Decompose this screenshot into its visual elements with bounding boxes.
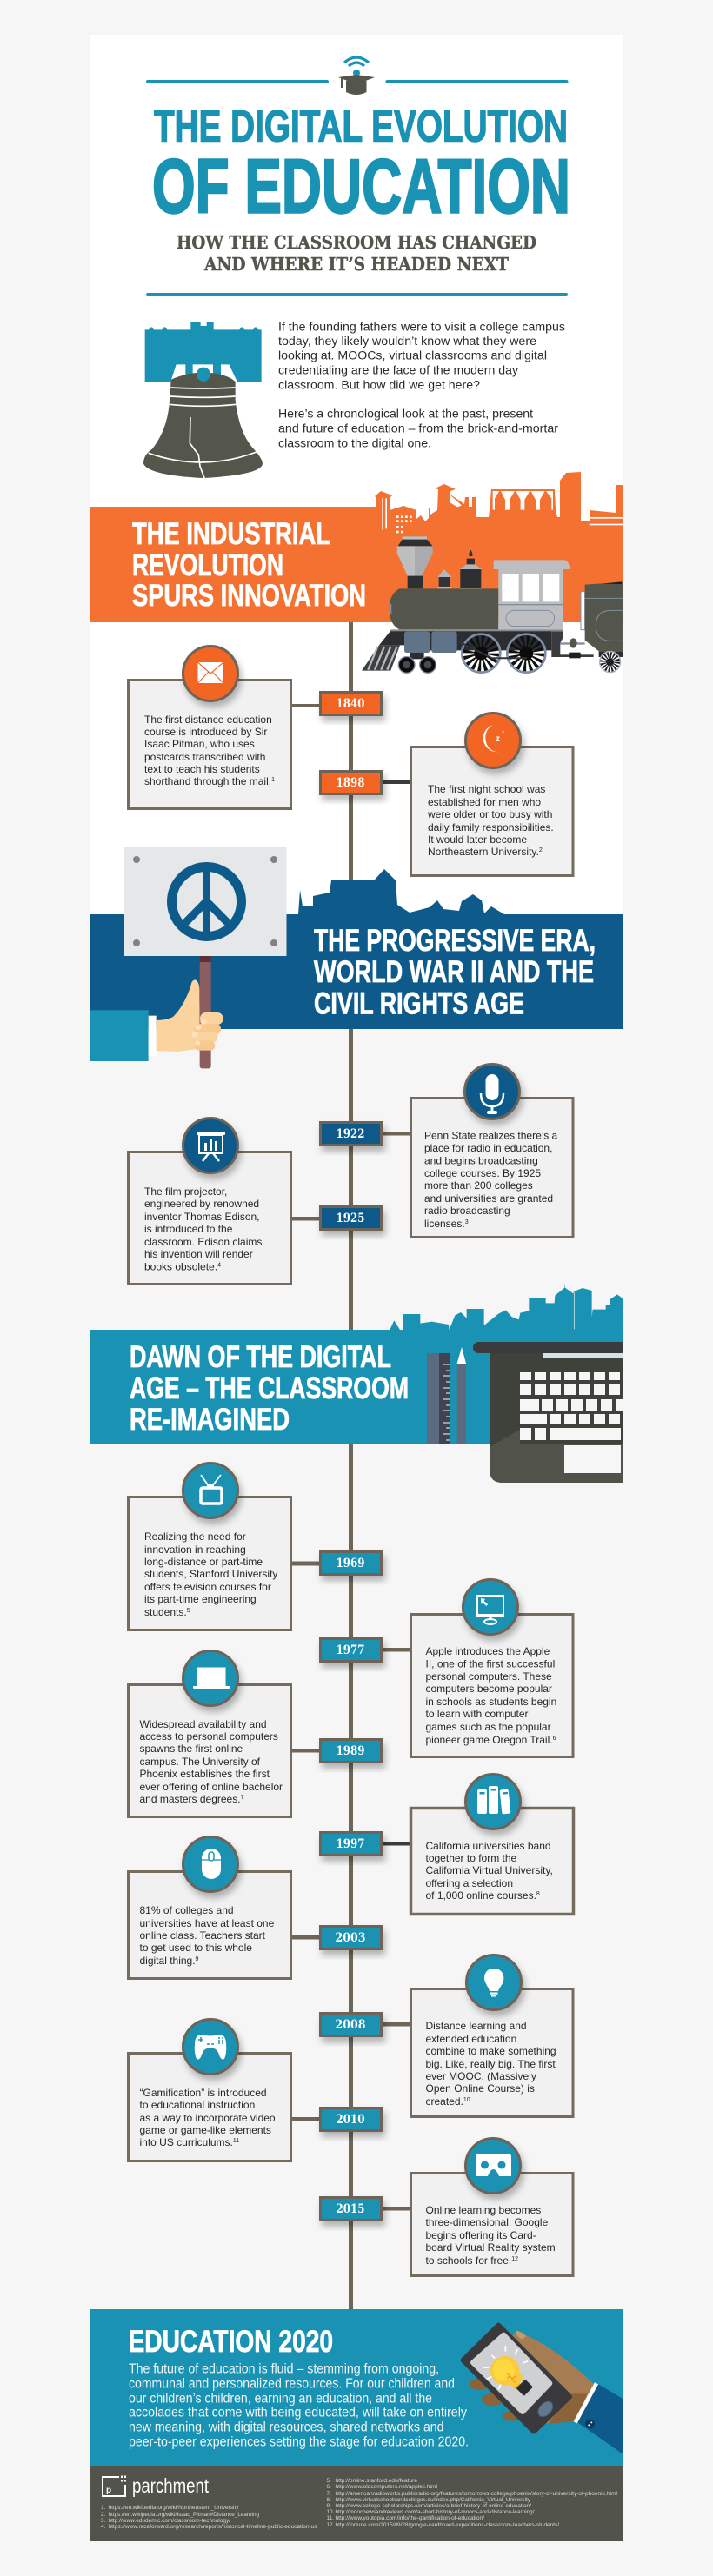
sources right column: http://www.virtualschoolsandcolleges.eu/index.php/California_Virtual_University	[336, 2497, 531, 2503]
intro text: If the founding fathers were to visit a college campus	[278, 320, 565, 334]
text card	[410, 747, 573, 876]
text card: students, Stanford University	[144, 1568, 277, 1580]
text card: Northeastern University.	[428, 846, 539, 858]
white header panel	[90, 35, 623, 914]
title: OF EDUCATION	[152, 143, 570, 229]
text card: engineered by renowned	[144, 1198, 259, 1210]
text card: is introduced to the	[144, 1223, 233, 1235]
text card	[129, 1684, 290, 1816]
header rule bottom	[146, 293, 568, 296]
connector	[383, 1132, 410, 1135]
icon: game controller	[183, 2020, 238, 2074]
parchment logo: parchment	[132, 2474, 209, 2497]
heading: EDUCATION 2020	[129, 2324, 333, 2359]
year 1969: 1969	[336, 1557, 365, 1570]
text card: Apple introduces the Apple	[426, 1645, 550, 1657]
heading: THE INDUSTRIAL	[132, 516, 330, 551]
intro text: Here’s a chronological look at the past, present	[278, 407, 533, 421]
panel: education 2020	[90, 2309, 623, 2466]
text card: big. Like, really big. The first	[426, 2058, 556, 2070]
event 1997: California Virtual University	[383, 1775, 574, 1914]
sources right column: http://americanradioworks.publicradio.org/features/tomorrows-college/phoenix/story-of-university-of-phoenix.html	[336, 2491, 617, 2497]
text card: 12	[511, 2256, 518, 2262]
connector	[292, 1749, 319, 1752]
text card: of 1,000 online courses.	[426, 1889, 536, 1902]
text card: game or game-like elements	[139, 2124, 271, 2136]
text card: It would later become	[428, 833, 527, 846]
text card: Distance learning and	[426, 2020, 527, 2032]
event 1977: Apple II	[383, 1580, 573, 1757]
icon: microphone	[464, 1064, 520, 1119]
sources left column	[101, 2505, 317, 2530]
event 1840: distance education	[129, 647, 319, 808]
text card: more than 200 colleges	[424, 1179, 533, 1192]
year 2015	[320, 2197, 381, 2220]
body text: our children’s children, earning an education, and all the	[129, 2392, 432, 2406]
heading: WORLD WAR II AND THE	[314, 954, 594, 989]
year 1898: 1898	[336, 776, 365, 790]
sources left column: 2.	[101, 2512, 106, 2518]
event 1969: television courses	[129, 1464, 319, 1630]
sources right column: http://moocnewsandreviews.com/a-short-history-of-moocs-and-distance-learning/	[336, 2509, 535, 2515]
text card	[129, 1497, 290, 1630]
sources right column: 6.	[327, 2484, 331, 2490]
icon: VR headset	[466, 2138, 520, 2194]
text card: Online learning becomes	[426, 2204, 541, 2216]
text card: ever MOOC, (Massively	[426, 2070, 536, 2082]
text card: Isaac Pitman, who uses	[144, 738, 255, 750]
text card: The first distance education	[144, 714, 272, 726]
text card: 1	[271, 777, 275, 783]
sources right column: http://online.stanford.edu/feature	[336, 2478, 417, 2484]
intro text: and future of education – from the brick-and-mortar	[278, 422, 559, 435]
text card: California universities band	[426, 1840, 551, 1852]
connector	[383, 2022, 410, 2027]
connector	[292, 704, 319, 707]
text card: licenses.	[424, 1218, 465, 1230]
text card: radio broadcasting	[424, 1205, 510, 1217]
text card: daily family responsibilities.	[428, 821, 554, 833]
text card: pioneer game Oregon Trail.	[426, 1734, 553, 1746]
text card: 10	[463, 2097, 470, 2103]
text card: to schools for free.	[426, 2254, 511, 2267]
body text: The future of education is fluid – stemming from ongoing,	[129, 2362, 439, 2376]
text card: personal computers. These	[426, 1670, 552, 1683]
banner with factory skyline	[90, 472, 623, 622]
intro text: looking at. MOOCs, virtual classrooms and digital	[278, 349, 547, 362]
event 1898: night school	[383, 713, 573, 876]
connector	[383, 1842, 410, 1846]
icon: moon: z	[502, 731, 504, 736]
year 1977: 1977	[336, 1643, 365, 1657]
title	[152, 101, 570, 229]
banner with city skyline	[90, 869, 623, 1029]
event 1989: first online campus	[129, 1651, 319, 1816]
intro text: today, they likely wouldn’t know what they were	[278, 335, 536, 348]
text card: 81% of colleges and	[139, 1904, 234, 1916]
text card: begins offering its Card-	[426, 2229, 536, 2241]
intro text: classroom. But how did we get here?	[278, 379, 480, 391]
text card: to educational instruction	[139, 2099, 255, 2111]
heading: CIVIL RIGHTS AGE	[314, 986, 524, 1020]
text card: three-dimensional. Google	[426, 2216, 549, 2228]
parchment logo	[103, 2474, 209, 2497]
event 2008: first MOOC	[383, 1955, 573, 2117]
text card: Penn State realizes there’s a	[424, 1130, 558, 1142]
text card: offers television courses for	[144, 1581, 271, 1593]
text card	[410, 1988, 573, 2117]
banner with city skyline	[90, 1283, 623, 1444]
text card	[129, 1152, 290, 1285]
text card: text to teach his students	[144, 763, 260, 775]
dark footer background	[90, 2466, 623, 2541]
year 1840: 1840	[336, 697, 365, 711]
heading: DAWN OF THE DIGITAL	[130, 1339, 391, 1374]
sources right column	[327, 2478, 617, 2528]
text card: 4	[217, 1262, 221, 1269]
year 1922: 1922	[336, 1127, 365, 1141]
year 2003	[320, 1926, 381, 1949]
text card: and universities are granted	[424, 1192, 553, 1205]
text card: college courses. By 1925	[424, 1167, 541, 1179]
text card: its part-time engineering	[144, 1593, 257, 1605]
year 1989	[320, 1740, 381, 1763]
text card: to get used to this whole	[139, 1942, 252, 1954]
year 2015: 2015	[336, 2202, 365, 2216]
text card: books obsolete.	[144, 1260, 217, 1272]
connector	[383, 2207, 410, 2211]
sources right column: 8.	[327, 2497, 331, 2503]
connector	[292, 1217, 319, 1220]
heading: SPURS INNOVATION	[132, 578, 366, 613]
teal background	[90, 2309, 623, 2466]
year 2003: 2003	[336, 1931, 365, 1945]
sources right column: http://www.college-scholarships.com/articles/a-brief-history-of-online-education/	[336, 2503, 531, 2509]
sources right column: 7.	[327, 2491, 331, 2497]
year 1989: 1989	[336, 1744, 365, 1758]
text card: shorthand through the mail.	[144, 775, 271, 787]
panel: industrial revolution banner	[90, 472, 623, 673]
year 1997: 1997	[336, 1837, 365, 1851]
text card: campus. The University of	[139, 1756, 261, 1768]
text card: and begins broadcasting	[424, 1154, 538, 1166]
icon: laptop computer	[183, 1651, 238, 1705]
connector	[292, 1935, 319, 1940]
text card: 9	[196, 1956, 199, 1962]
sources left column: https://en.wikipedia.org/wiki/Isaac_Pitman#Distance_Learning	[108, 2512, 259, 2518]
connector	[292, 2117, 319, 2121]
year 1898	[320, 772, 381, 794]
year 1969	[320, 1552, 381, 1575]
sources right column: http://www.oldcomputers.net/appleii.html	[336, 2484, 437, 2490]
sources right column: 10.	[327, 2509, 335, 2515]
text card: in schools as students begin	[426, 1696, 556, 1708]
icon: moon: z	[496, 734, 500, 744]
header rule left	[146, 80, 329, 83]
text card: established for men who	[428, 796, 541, 808]
icon: projector screen	[183, 1118, 238, 1173]
text card: online class. Teachers start	[139, 1929, 266, 1942]
text card: board Virtual Reality system	[426, 2241, 556, 2254]
icon: moon	[466, 713, 520, 768]
icon: hand holding phone with light bulb	[463, 2326, 623, 2453]
text card: games such as the popular	[426, 1721, 551, 1733]
sources left column: 4.	[101, 2524, 106, 2530]
year 2008: 2008	[336, 2018, 365, 2032]
text card	[129, 680, 290, 808]
icon: desktop monitor	[463, 1580, 518, 1634]
heading	[132, 516, 366, 613]
text card: Open Online Course) is	[426, 2082, 535, 2095]
intro text: classroom to the digital one.	[278, 436, 431, 450]
year 1925	[320, 1206, 381, 1229]
timeline spine	[349, 622, 353, 2309]
text card: 7	[241, 1795, 244, 1801]
icon: hand holding peace sign	[90, 847, 287, 1068]
sources right column: http://www.youtopia.com/info/the-gamification-of-education/	[336, 2515, 484, 2521]
title: THE DIGITAL EVOLUTION	[154, 101, 568, 151]
text card: to learn with computer	[426, 1708, 529, 1720]
text card: 11	[233, 2138, 239, 2144]
text card: California Virtual University,	[426, 1864, 553, 1876]
text card: into US curriculums.	[139, 2136, 233, 2148]
text card: postcards transcribed with	[144, 751, 265, 763]
icon: laptop	[473, 1342, 630, 1483]
text card: 3	[465, 1219, 469, 1225]
text card: “Gamification” is introduced	[139, 2087, 267, 2099]
year 2008	[320, 2013, 381, 2035]
panel: progressive era banner	[90, 847, 623, 1068]
body text: peer-to-peer experiences setting the stage for education 2020.	[129, 2435, 469, 2449]
icon: television	[183, 1464, 238, 1517]
icon: books	[466, 1775, 520, 1829]
text card: offering a selection	[426, 1877, 513, 1889]
heading: THE PROGRESSIVE ERA,	[314, 923, 596, 958]
subtitle	[177, 232, 536, 275]
text card: computers become popular	[426, 1683, 552, 1695]
text card	[129, 1872, 290, 1978]
text card: spawns the first online	[139, 1743, 243, 1755]
panel: footer sources	[90, 2466, 623, 2541]
text card: 5	[187, 1608, 190, 1614]
text card	[410, 1808, 574, 1914]
text card: II, one of the first successful	[426, 1658, 555, 1670]
text card: universities have at least one	[139, 1917, 275, 1929]
text card: 6	[553, 1736, 556, 1742]
year 1922	[320, 1123, 381, 1145]
text card: together to form the	[426, 1852, 517, 1864]
text card	[410, 1099, 573, 1238]
text card: course is introduced by Sir	[144, 726, 267, 738]
heading: RE-IMAGINED	[130, 1402, 290, 1437]
text card: Widespread availability and	[139, 1718, 267, 1730]
heading: REVOLUTION	[132, 548, 283, 582]
text card: place for radio in education,	[424, 1142, 552, 1154]
year 1997	[320, 1832, 381, 1855]
year 1977	[320, 1639, 381, 1662]
icon: light bulb	[466, 1955, 522, 2009]
sources right column: 12.	[327, 2522, 335, 2528]
text card: ever offering of online bachelor	[139, 1781, 283, 1793]
parchment logo: p	[106, 2486, 111, 2495]
text card: The first night school was	[428, 783, 545, 795]
panel: dawn of the digital age banner	[90, 1283, 630, 1483]
sources left column: 1.	[101, 2505, 106, 2511]
header rule right	[386, 80, 569, 83]
year 1925: 1925	[336, 1212, 365, 1225]
text card: and masters degrees.	[139, 1793, 241, 1805]
text card: long-distance or part-time	[144, 1556, 263, 1568]
icon: wifi graduation cap	[338, 57, 375, 95]
text card	[410, 1615, 573, 1757]
sources left column: http://www.edudemic.com/classroom-technology/	[108, 2518, 230, 2524]
sources left column: 3.	[101, 2518, 106, 2524]
text card: Realizing the need for	[144, 1530, 246, 1543]
event 2010: gamification	[129, 2020, 319, 2161]
sources right column: http://fortune.com/2015/09/28/google-cardboard-expeditions-classroom-teachers-students/	[336, 2522, 559, 2528]
icon: computer mouse	[183, 1837, 238, 1891]
event 2003: online classes	[129, 1837, 319, 1978]
text card: combine to make something	[426, 2045, 556, 2057]
sources left column: https://www.raceforward.org/research/reports/historical-timeline-public-education-us	[108, 2524, 317, 2530]
sources left column: https://en.wikipedia.org/wiki/Northeastern_University	[108, 2505, 239, 2511]
year 1840	[320, 692, 381, 714]
subtitle: HOW THE CLASSROOM HAS CHANGED	[177, 232, 536, 253]
header block	[146, 57, 570, 296]
text card: digital thing.	[139, 1955, 196, 1967]
year 2010	[320, 2108, 381, 2131]
body text	[129, 2362, 469, 2449]
text card: Phoenix establishes the first	[139, 1768, 270, 1780]
text card: 2	[539, 847, 543, 853]
sources right column: 11.	[327, 2515, 334, 2521]
sources right column: 5.	[327, 2478, 331, 2484]
text card: classroom. Edison claims	[144, 1236, 262, 1248]
body text: new meaning, with digital resources, shared networks and	[129, 2420, 443, 2435]
connector	[292, 1561, 319, 1566]
text card: access to personal computers	[139, 1730, 278, 1743]
body text: accolades that come with being educated, will take on entirely	[129, 2406, 467, 2420]
connector	[383, 780, 410, 784]
heading	[130, 1339, 409, 1437]
right page margin	[623, 0, 713, 2576]
text card: The film projector,	[144, 1185, 227, 1198]
intro text	[278, 320, 565, 450]
connector	[383, 1648, 410, 1651]
sources right column: 9.	[327, 2503, 331, 2509]
text card	[410, 2173, 573, 2275]
text card: inventor Thomas Edison,	[144, 1211, 260, 1223]
intro text: credentialing are the face of the modern day	[278, 363, 518, 377]
text card: innovation in reaching	[144, 1544, 246, 1556]
year 2010: 2010	[336, 2113, 365, 2127]
text card: students.	[144, 1606, 187, 1618]
heading	[314, 923, 596, 1020]
text card: as a way to incorporate video	[139, 2112, 276, 2124]
subtitle: AND WHERE IT’S HEADED NEXT	[203, 254, 510, 275]
icon: envelope	[183, 647, 238, 700]
body text: communal and personalized resources. For our children and	[129, 2376, 455, 2392]
text card: 8	[536, 1891, 540, 1897]
text card: were older or too busy with	[427, 808, 552, 820]
event 2015: Google Cardboard	[383, 2138, 573, 2275]
event 1922: radio	[383, 1064, 573, 1238]
text card: extended education	[426, 2033, 516, 2045]
icon: liberty bell	[143, 322, 263, 479]
text card: created.	[426, 2095, 463, 2108]
icon: steam locomotive	[362, 536, 623, 673]
event 1925: film projector	[129, 1118, 319, 1285]
text card	[129, 2053, 290, 2161]
text card: his invention will render	[144, 1248, 253, 1260]
icon: ruler and pencil	[427, 1347, 466, 1444]
heading: AGE – THE CLASSROOM	[130, 1371, 409, 1405]
